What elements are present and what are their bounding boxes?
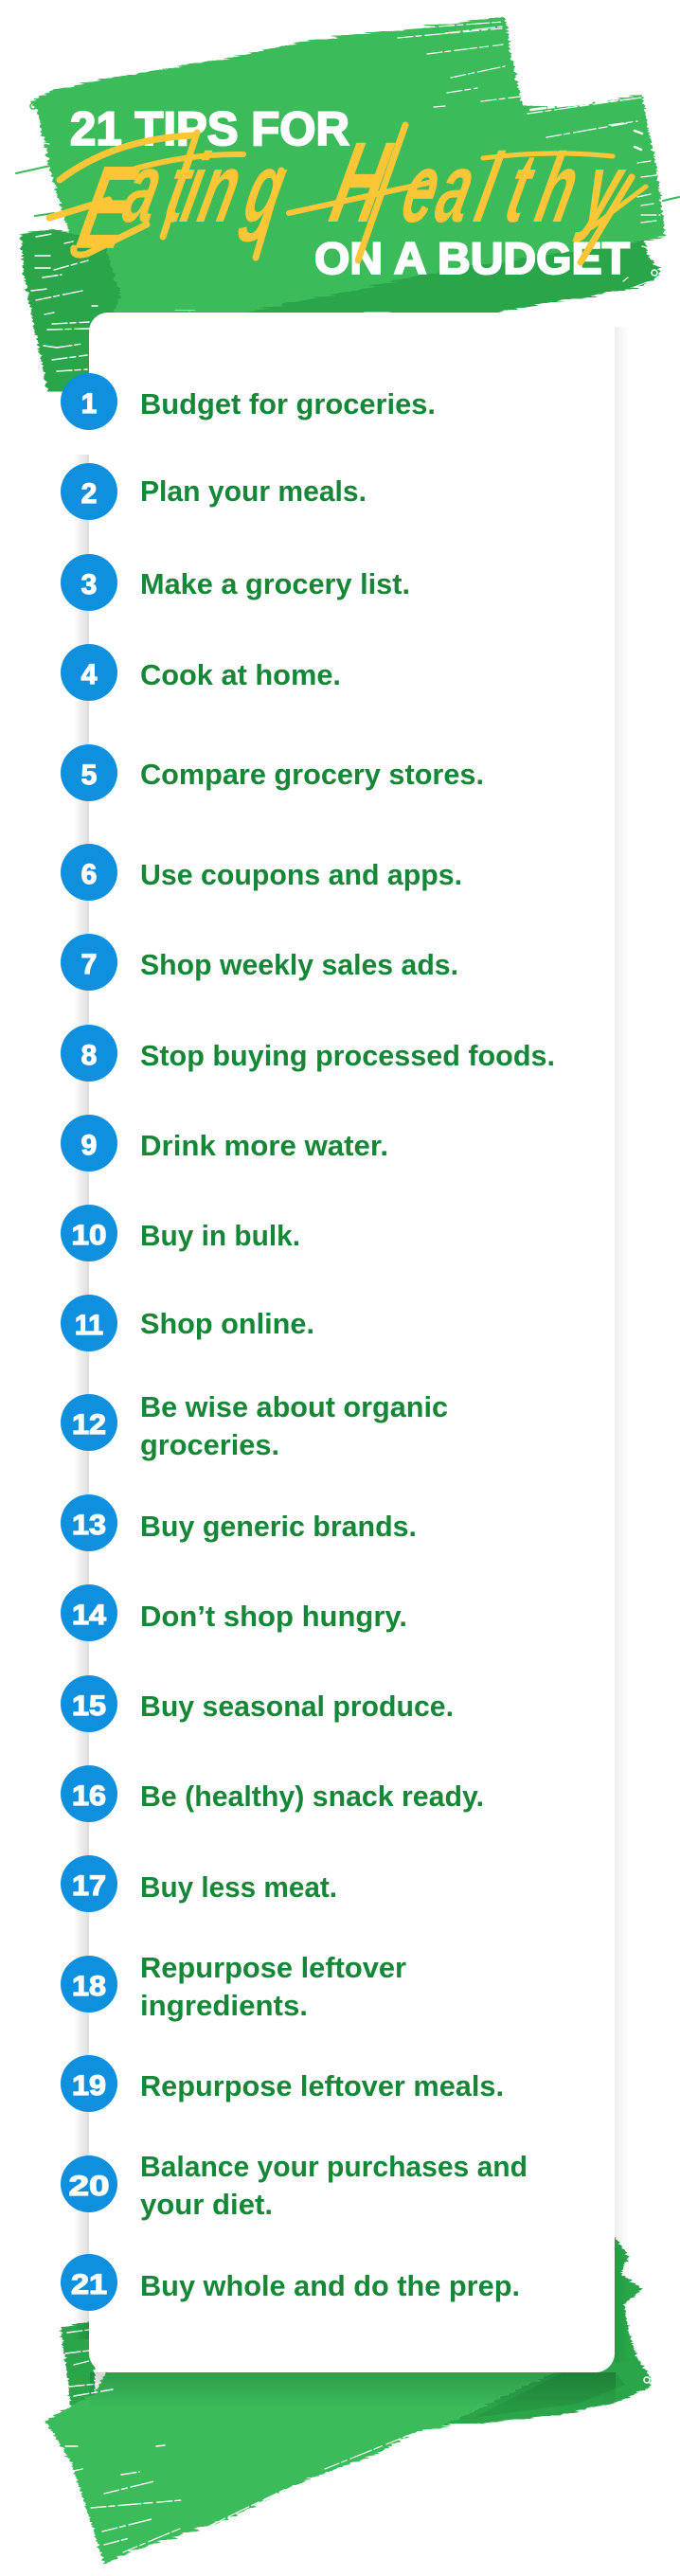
- tip 2: [61, 463, 367, 520]
- tip 6: [61, 844, 462, 901]
- card fold shadow on the green: [90, 2372, 616, 2408]
- tip 3: [61, 554, 410, 611]
- tip 4: 4: [81, 659, 98, 690]
- tip 6: Use coupons and apps.: [140, 858, 462, 891]
- tip 20: Balance your purchases and: [140, 2150, 528, 2183]
- tip 10: Buy in bulk.: [140, 1219, 300, 1252]
- white tips card: [89, 313, 615, 2372]
- tip 18: ingredients.: [140, 1989, 308, 2022]
- white streaks on bottom brush: [65, 2330, 412, 2552]
- tip 18: 18: [72, 1971, 106, 2002]
- tip 17: [61, 1855, 337, 1912]
- tip 12: 12: [72, 1409, 106, 1440]
- tip 10: 10: [72, 1220, 106, 1251]
- tip 15: [61, 1675, 454, 1732]
- title line: 21 tips for: 21 TIPS FOR: [70, 102, 349, 155]
- tip 16: 16: [72, 1780, 106, 1812]
- tip 3: Make a grocery list.: [140, 567, 410, 600]
- tip 18: [61, 1951, 406, 2022]
- tip 4: Cook at home.: [140, 658, 341, 691]
- title script: eating healthy: [49, 118, 646, 274]
- tip 7: [61, 934, 458, 991]
- card shadow left: [74, 455, 89, 2339]
- tip 16: Be (healthy) snack ready.: [140, 1780, 484, 1813]
- tip 17: Buy less meat.: [140, 1870, 337, 1904]
- tip 21: Buy whole and do the prep.: [140, 2269, 520, 2302]
- tip 5: Compare grocery stores.: [140, 758, 484, 791]
- tip 16: [61, 1765, 484, 1822]
- tip 17: 17: [72, 1870, 106, 1902]
- tip 12: groceries.: [140, 1428, 279, 1461]
- bottom green paint brush background: [45, 2237, 651, 2564]
- tip 8: 8: [81, 1040, 97, 1071]
- tip 9: 9: [81, 1130, 97, 1161]
- tip 13: [61, 1494, 417, 1551]
- tip 3: 3: [81, 569, 97, 600]
- dark fold corner right: [474, 2372, 625, 2418]
- tip 12: [61, 1390, 448, 1461]
- tip 7: Shop weekly sales ads.: [140, 948, 458, 981]
- tip 4: [61, 644, 341, 701]
- tip 14: Don’t shop hungry.: [140, 1600, 407, 1633]
- tip 12: Be wise about organic: [140, 1390, 448, 1423]
- tip 19: Repurpose leftover meals.: [140, 2069, 504, 2102]
- tip 9: [61, 1115, 388, 1172]
- top green paint brush background: [16, 16, 679, 390]
- title script: eating healthy: ealthy: [392, 134, 635, 243]
- title line: on a budget: ON A BUDGET: [314, 233, 630, 283]
- tip 13: Buy generic brands.: [140, 1510, 417, 1543]
- outer green flecks: [16, 103, 679, 276]
- tip 5: [61, 744, 484, 801]
- tip 8: [61, 1025, 555, 1082]
- tip 19: [61, 2055, 504, 2112]
- title script: eating healthy: ating: [114, 134, 322, 243]
- script decorative swashes: [49, 125, 646, 262]
- card shadow right: [615, 327, 628, 2363]
- tip 13: 13: [72, 1510, 106, 1541]
- tip 18: Repurpose leftover: [140, 1951, 406, 1984]
- tip 1: Budget for groceries.: [140, 387, 436, 420]
- title script: eating healthy: H: [320, 118, 402, 246]
- title script: eating healthy: E: [67, 142, 148, 274]
- tip 20: [61, 2150, 528, 2221]
- tip 14: 14: [72, 1600, 106, 1631]
- tip 1: 1: [81, 388, 97, 420]
- tip 11: 11: [75, 1310, 103, 1341]
- tip 20: your diet.: [140, 2188, 273, 2221]
- paint ring fleck: [644, 2377, 650, 2383]
- tip 20: 20: [68, 2171, 110, 2202]
- tip 21: [61, 2254, 520, 2311]
- tip 10: [61, 1205, 300, 1261]
- tip 5: 5: [81, 760, 97, 791]
- tip 14: [61, 1584, 407, 1641]
- tip 21: 21: [71, 2269, 107, 2300]
- tip 9: Drink more water.: [140, 1129, 388, 1162]
- tip 11: [61, 1295, 314, 1351]
- title: [49, 102, 646, 283]
- tip 7: 7: [81, 949, 97, 980]
- tip 2: Plan your meals.: [140, 474, 367, 508]
- tip 1: [61, 373, 436, 430]
- white dry-brush streaks: [31, 22, 660, 371]
- tip 2: 2: [81, 478, 97, 510]
- tip 19: 19: [72, 2070, 106, 2102]
- tip 15: Buy seasonal produce.: [140, 1690, 454, 1723]
- tip 15: 15: [72, 1690, 106, 1722]
- tip 8: Stop buying processed foods.: [140, 1039, 555, 1072]
- tip 11: Shop online.: [140, 1307, 314, 1340]
- tip 6: 6: [81, 859, 97, 890]
